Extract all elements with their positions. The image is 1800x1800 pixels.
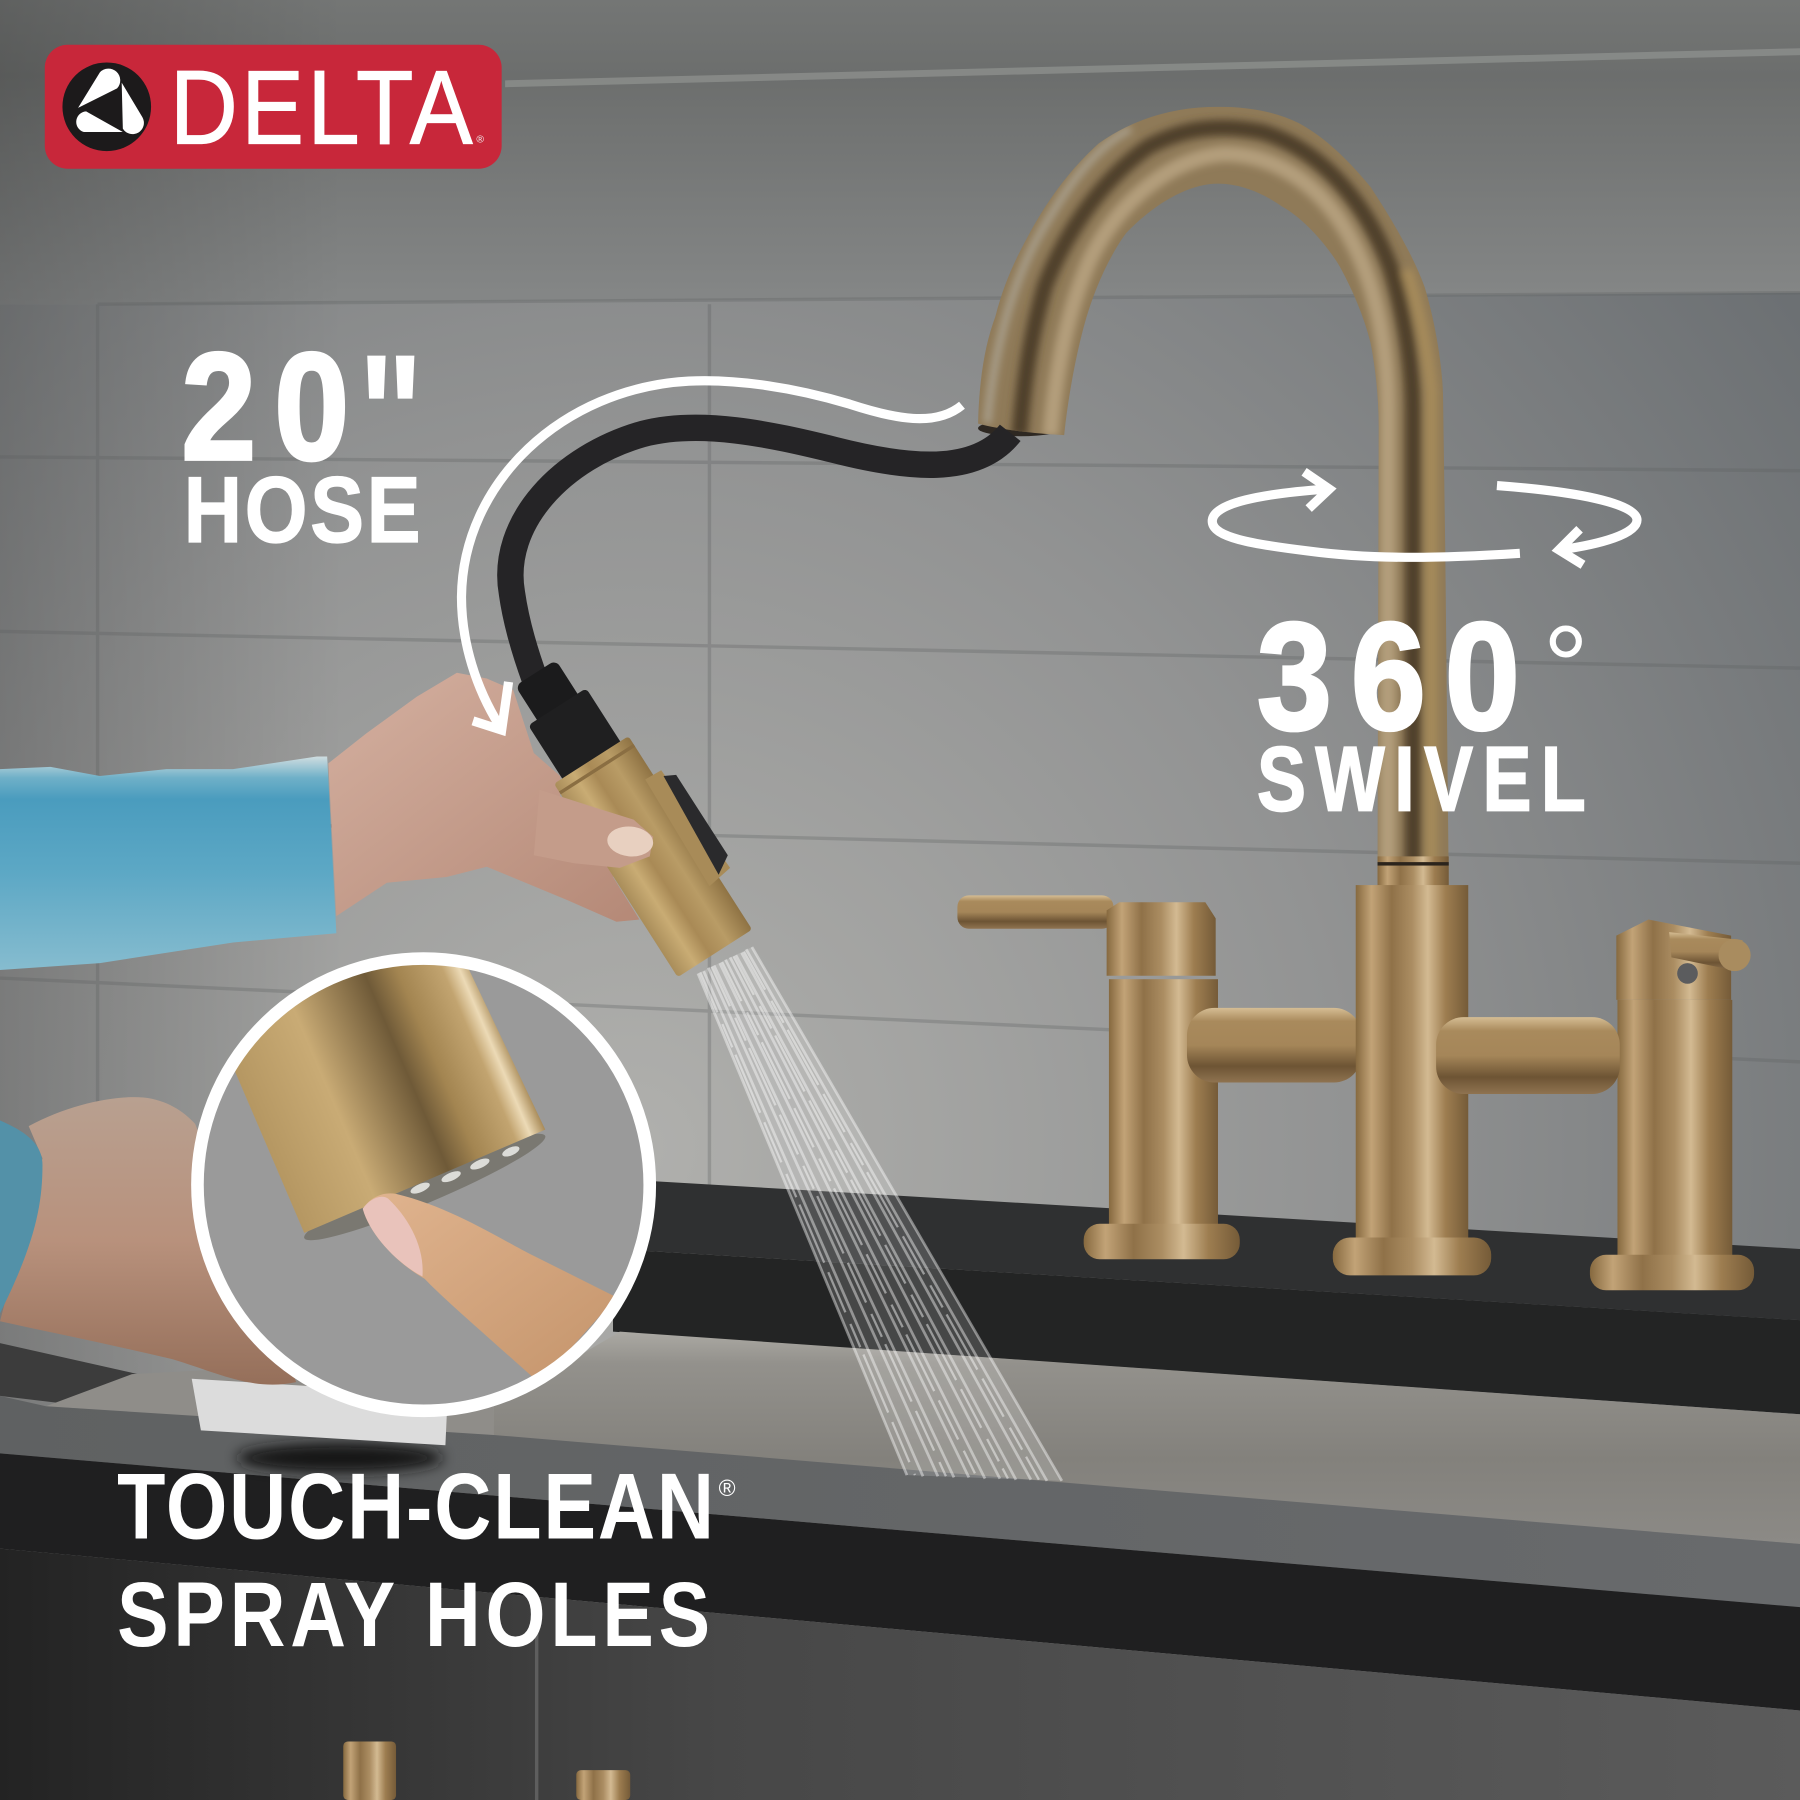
logo: Delta badge (45, 45, 502, 169)
arrow: hose length (461, 381, 962, 730)
left handle (957, 895, 1240, 1259)
swivel collar (1378, 856, 1449, 886)
inset circle: touch-clean detail (197, 930, 650, 1411)
icon: Delta triangle mark (62, 62, 151, 151)
fingertip (363, 1193, 616, 1383)
sleeve: upper arm (0, 757, 336, 970)
callout: touch-clean spray holes: ® (719, 1475, 736, 1501)
callout: 20 inch hose: " (358, 320, 423, 512)
upper hand holding sprayer (328, 673, 653, 922)
arrows: swivel rotation (1212, 472, 1637, 565)
callout: 360 degree swivel: 360 (1257, 592, 1520, 762)
callout: 360 degree swivel (1257, 592, 1589, 830)
left connector (1187, 1008, 1361, 1083)
gooseneck spout (978, 107, 1448, 856)
callout: 20 inch hose: HOSE (184, 457, 421, 562)
spray face with rubber nozzles (304, 1134, 546, 1240)
index finger over sprayer (534, 790, 654, 868)
wordmark: DELTA (170, 50, 473, 167)
callout: 360 degree swivel: ° (1543, 603, 1589, 731)
callout: touch-clean spray holes: TOUCH-CLEAN (117, 1454, 714, 1559)
center column (1333, 885, 1491, 1275)
cabinet knobs (343, 1741, 630, 1800)
lower hand (0, 1097, 296, 1385)
callout: touch-clean spray holes: SPRAY HOLES (117, 1563, 710, 1666)
callout: 20 inch hose (181, 320, 423, 562)
right handle (1590, 920, 1754, 1290)
bridge faucet (957, 98, 1754, 1290)
right connector (1436, 1017, 1620, 1094)
water stream (698, 947, 1062, 1481)
callout: touch-clean spray holes (117, 1454, 736, 1666)
kitchen counters and sink (0, 1181, 1800, 1800)
white object on counter (192, 1379, 448, 1445)
callout: 360 degree swivel: SWIVEL (1257, 728, 1586, 830)
pull-down sprayer (498, 649, 752, 977)
callout: 20 inch hose: 20 (181, 322, 349, 492)
brass cylinder (235, 964, 546, 1233)
hose (510, 428, 1010, 680)
logo: Delta badge: ® (476, 134, 484, 145)
